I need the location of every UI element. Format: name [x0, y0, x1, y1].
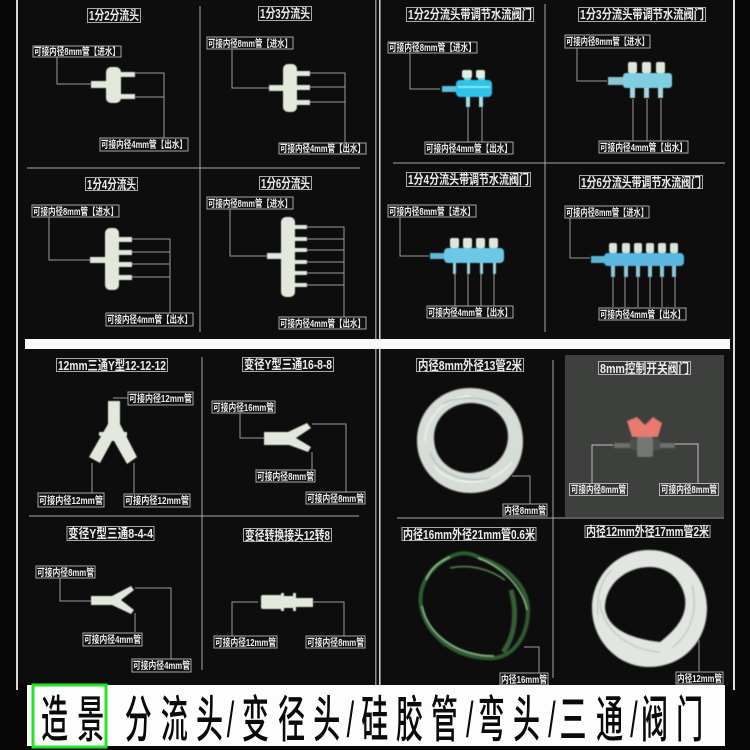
label: 8mm: [306, 636, 365, 649]
label: 12mm: [214, 636, 277, 649]
label: 12mm inner: 内径12mm管: [677, 672, 722, 685]
icon: 1-to-4 white splitter: [90, 228, 132, 290]
heading: 1-to-6 splitter: 1分6分流头: [261, 176, 310, 191]
label: 4mm lower: [83, 633, 142, 646]
label: inlet 8mm: 可接内径8mm管【进水】: [566, 206, 648, 219]
label: 8mm lower: [256, 470, 315, 483]
label: 8mm inner: 内径8mm管: [504, 504, 546, 517]
icon: white reducing Y fitting small: [91, 586, 134, 614]
label: inlet 8mm: [565, 206, 649, 219]
label: outlet 4mm: [100, 138, 188, 151]
icon: blue 3-way manifold: [608, 62, 672, 98]
label: 8mm: 可接内径8mm管: [37, 566, 94, 579]
label: 8mm: 可接内径8mm管: [307, 636, 364, 649]
label: 12mm top: [128, 392, 193, 405]
label: 8mm left: 可接内径8mm管: [571, 483, 626, 496]
label: 8mm right: 可接内径8mm管: [661, 483, 717, 496]
label: 12mm inner: [676, 672, 723, 685]
label: 16mm inner: [500, 673, 548, 686]
panel: splitters with flow valve: [388, 4, 725, 332]
heading: 1-to-3 splitter: 1分3分流头: [260, 6, 310, 21]
label: inlet 8mm: [388, 41, 477, 54]
label: inlet 8mm: 可接内径8mm管【进水】: [389, 41, 476, 54]
heading: 12mm tube: 内径12mm外径17mm管2米: [586, 524, 709, 539]
label: inlet 8mm: 可接内径8mm管【进水】: [208, 37, 292, 50]
label: inlet 8mm: 可接内径8mm管【进水】: [34, 45, 120, 58]
icon: 1-to-3 white splitter: [269, 64, 310, 112]
label: inlet 8mm: 可接内径8mm管【进水】: [33, 205, 118, 218]
label: inlet 8mm: [388, 205, 476, 218]
icon: 1-to-2 white splitter: [91, 67, 135, 103]
label: outlet 4mm: 可接内径4mm管【出水】: [426, 142, 512, 155]
label: 4mm lower: 可接内径4mm管: [84, 633, 141, 646]
icon: clear 8mm tube coil: [417, 388, 523, 493]
icon: blue 6-way manifold: [591, 243, 684, 277]
label: outlet 4mm: 可接内径4mm管【出水】: [107, 313, 192, 326]
icon: white straight reducer: [261, 593, 313, 611]
icon: red handled valve: [614, 417, 675, 457]
label: 12mm left: 可接内径12mm管: [39, 494, 103, 507]
heading: 1-to-4 with valve: 1分4分流头带调节水流阀门: [408, 172, 529, 187]
label: 8mm left: [570, 483, 628, 496]
heading: 1-to-6 with valve: 1分6分流头带调节水流阀门: [581, 175, 701, 190]
label: 12mm top: 可接内径12mm管: [129, 392, 192, 405]
label: inlet 8mm: [32, 205, 119, 218]
label: 8mm right: 可接内径8mm管: [307, 492, 364, 505]
label: 4mm right: 可接内径4mm管: [133, 659, 190, 672]
heading: 1-to-2 splitter: 1分2分流头: [89, 8, 139, 23]
label: outlet 4mm: 可接内径4mm管【出水】: [280, 142, 365, 155]
label: inlet 8mm: [33, 45, 121, 58]
heading: 1-to-3 with valve: 1分3分流头带调节水流阀门: [580, 7, 704, 22]
label: outlet 4mm: [106, 313, 193, 326]
label: outlet 4mm: [599, 308, 686, 321]
label: outlet 4mm: 可接内径4mm管【出水】: [600, 141, 687, 154]
label: outlet 4mm: [599, 141, 688, 154]
label: 8mm right: [660, 483, 718, 496]
label: 12mm left: [38, 493, 104, 507]
heading: reducing Y tee 8-4-4: 变径Y型三通8-4-4: [68, 526, 154, 541]
banner: bottom title: [27, 685, 725, 748]
heading: 12mm Y tee: 12mm三通Y型12-12-12: [58, 358, 166, 373]
heading: 8mm tube: 内径8mm外径13管2米: [418, 358, 522, 373]
label: 16mm: 可接内径16mm管: [213, 401, 274, 414]
label: outlet 4mm: 可接内径4mm管【出水】: [428, 306, 512, 319]
icon: blue 4-way manifold: [430, 238, 504, 274]
heading: product list: 分流头/变径头/硅胶管/弯头/三通/阀门: [125, 692, 703, 748]
label: outlet 4mm: 可接内径4mm管【出水】: [600, 308, 685, 321]
label: outlet 4mm: 可接内径4mm管【出水】: [280, 317, 365, 330]
icon: white reducing Y fitting: [264, 423, 311, 452]
icon: white Y fitting 12-12-12: [89, 401, 137, 464]
heading: reducing Y tee 16-8-8: 变径Y型三通16-8-8: [244, 357, 332, 372]
label: 12mm: 可接内径12mm管: [215, 636, 276, 649]
label: 8mm lower: 可接内径8mm管: [257, 470, 314, 483]
label: 4mm right: [132, 659, 191, 672]
label: outlet 4mm: [279, 317, 366, 330]
label: 8mm right: [306, 492, 365, 505]
label: inlet 8mm: [207, 197, 293, 210]
label: outlet 4mm: [425, 142, 513, 155]
label: 8mm: [36, 566, 95, 579]
label: 8mm inner: [503, 504, 547, 517]
label: outlet 4mm: [427, 306, 513, 319]
label: inlet 8mm: [207, 37, 293, 50]
panel: Y connectors: [29, 357, 365, 672]
heading: 1-to-2 with valve: 1分2分流头带调节水流阀门: [408, 7, 532, 22]
label: 16mm inner: 内径16mm管: [501, 673, 547, 686]
label: outlet 4mm: [279, 142, 366, 155]
heading: reducer 12 to 8: 变径转换接头12转8: [245, 528, 330, 543]
label: inlet 8mm: 可接内径8mm管【进水】: [389, 205, 475, 218]
label: 16mm: [212, 401, 275, 414]
label: inlet 8mm: 可接内径8mm管【进水】: [208, 197, 292, 210]
panel: on-off valve: [565, 355, 724, 517]
label: inlet 8mm: [565, 35, 650, 48]
heading: 1-to-4 splitter: 1分4分流头: [87, 177, 136, 192]
label: outlet 4mm: 可接内径4mm管【出水】: [101, 138, 187, 151]
panel: splitters without valve: [27, 6, 366, 332]
heading: 16mm green tube: 内径16mm外径21mm管0.6米: [403, 527, 535, 542]
label: 12mm right: 可接内径12mm管: [125, 494, 189, 507]
label: inlet 8mm: 可接内径8mm管【进水】: [566, 35, 649, 48]
icon: clear 12mm tube coil: [592, 550, 707, 667]
brand: green box: 造景: [41, 692, 104, 748]
icon: 1-to-6 white splitter: [267, 217, 307, 297]
panel: tubing and valve: [397, 355, 724, 686]
icon: green tube coil: [421, 553, 528, 658]
heading: valve: 8mm控制开关阀门: [600, 361, 689, 376]
icon: blue 2-way manifold: [442, 70, 492, 107]
